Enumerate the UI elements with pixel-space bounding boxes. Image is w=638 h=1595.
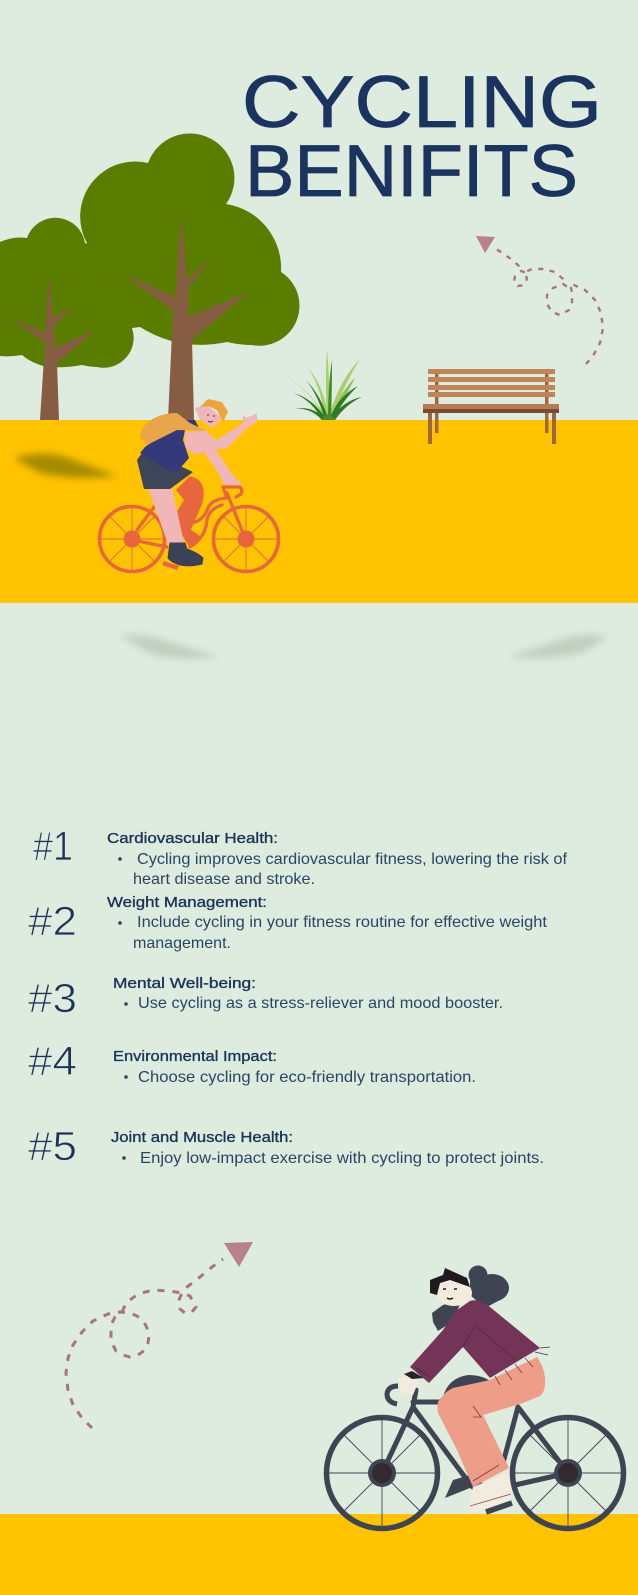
item 3: Use cycling as a stress-reliever and mood booster. [138,995,503,1012]
cyclist: bottom, dark bike [326,1266,624,1528]
ground band: bottom [0,1514,638,1595]
hair [200,399,228,422]
small tree [0,218,145,420]
cyclist: top, orange bike [99,399,279,572]
icon: bench [423,369,559,444]
scarf [432,1300,462,1331]
head [436,1280,472,1306]
bike [326,1386,624,1528]
title [242,62,602,212]
title: BENIFITS [245,131,578,212]
jacket [410,1300,540,1383]
arrow: dashed top [476,236,603,364]
icon: plant [283,349,362,420]
item 4: Environmental Impact: [113,1048,277,1065]
shirt [140,420,200,472]
item 5: #5 [28,1123,77,1169]
item 1: Cardiovascular Health: [107,830,278,847]
item 1: Cycling improves cardiovascular fitness, lowering the risk of [137,851,568,868]
back leg [177,477,203,547]
backpack [468,1266,509,1308]
back foot [445,1475,486,1498]
item 4: #4 [28,1038,77,1084]
shadows: mid right [507,634,608,659]
shoe [168,543,203,566]
item 2 [28,894,548,952]
raised arm [207,413,257,450]
saddle [443,1375,490,1397]
bike [99,487,279,572]
arrow: dashed bottom [66,1242,253,1428]
item 1 [33,823,568,888]
fringe [495,1358,533,1385]
face [443,1289,457,1299]
trousers [438,1357,545,1487]
front leg [148,487,184,544]
cuff [404,1371,424,1379]
shadows: mid left [120,634,220,659]
backpack [140,413,207,445]
item 4: Choose cycling for eco-friendly transportation. [138,1069,476,1086]
shoe [468,1473,513,1513]
hair [430,1268,470,1295]
item 2: Weight Management: [107,894,267,911]
item 5: Joint and Muscle Health: [111,1129,293,1146]
item 2: management. [133,935,231,952]
shorts [137,453,193,489]
item 2: Include cycling in your fitness routine for effective weight [137,914,548,931]
face [207,415,215,422]
item 3 [28,975,503,1021]
item 4 [28,1038,476,1086]
item 5 [28,1123,544,1169]
hand [397,1376,418,1395]
item 1: #1 [33,823,73,869]
item 3: Mental Well-being: [113,975,256,992]
item 2: #2 [28,898,77,944]
large tree [80,133,299,420]
item 5: Enjoy low-impact exercise with cycling to protect joints. [140,1150,544,1167]
head [195,405,222,428]
item 1: heart disease and stroke. [133,871,315,888]
title: CYCLING [242,62,602,143]
ground band: top [0,420,638,603]
arm to handlebar [185,430,242,485]
item 3: #3 [28,975,77,1021]
shadow under tree [14,454,117,478]
